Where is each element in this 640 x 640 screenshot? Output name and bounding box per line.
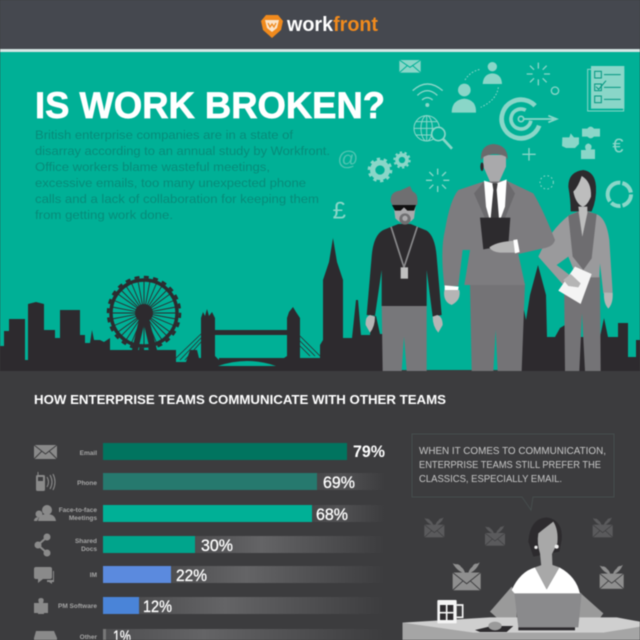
bar labels: Docs bbox=[81, 546, 97, 553]
bar: phone: 69% bbox=[323, 474, 355, 492]
bar: other bbox=[103, 628, 385, 640]
arch under bridge bbox=[218, 361, 276, 366]
bar labels: PM Software bbox=[58, 603, 97, 610]
bar labels: Phone bbox=[77, 480, 97, 487]
icon: puzzle piece bbox=[34, 598, 48, 614]
icon: wifi bbox=[413, 84, 443, 107]
icon: share bbox=[34, 534, 50, 556]
illustration: woman at desk with flying emails bbox=[403, 517, 640, 640]
intro text block: calls and a lack of collaboration for keeping them bbox=[35, 192, 319, 206]
bar: IM: 22% bbox=[176, 567, 207, 585]
callout: speech bubble: CLASSICS, ESPECIALLY EMAIL. bbox=[419, 474, 562, 485]
icon: envelope bbox=[399, 60, 421, 73]
people group bbox=[366, 144, 613, 371]
icon: plus bbox=[522, 148, 536, 161]
bar: PM software: 12% bbox=[143, 598, 172, 616]
callout: speech bubble bbox=[412, 434, 614, 510]
bar: face-to-face: 68% bbox=[316, 506, 348, 524]
section heading: HOW ENTERPRISE TEAMS COMMUNICATE WITH OTHER TEAMS bbox=[34, 392, 446, 407]
bar labels: IM bbox=[90, 572, 97, 579]
icon: sunburst bbox=[527, 63, 550, 85]
icon: euro: € bbox=[612, 136, 623, 158]
bar labels: Email bbox=[80, 450, 97, 457]
bar: face-to-face bbox=[103, 505, 385, 524]
intro text block: British enterprise companies are in a state of bbox=[35, 128, 294, 142]
skyline: london silhouette bbox=[0, 238, 640, 371]
bar labels: Face-to-face bbox=[59, 507, 97, 514]
icon: winged envelopes bbox=[424, 517, 624, 590]
bar: shared docs: 30% bbox=[201, 537, 233, 555]
bar: shared docs bbox=[103, 536, 385, 555]
icon: target and arrow bbox=[496, 94, 557, 144]
icon: donut chart bbox=[608, 183, 631, 206]
icon: email bbox=[34, 445, 57, 459]
bar: email: 79% bbox=[353, 443, 385, 461]
icon: connected people bbox=[452, 62, 502, 113]
intro text block: from getting work done. bbox=[35, 208, 173, 222]
intro text block: Office workers blame wasteful meetings, bbox=[35, 160, 270, 174]
icon: london eye bbox=[108, 277, 180, 350]
icon: gears bbox=[369, 152, 410, 181]
panel: header bar bbox=[0, 0, 640, 52]
bar labels bbox=[58, 450, 97, 640]
icon: mug bbox=[437, 600, 463, 623]
channel icons bbox=[34, 445, 57, 640]
icon: checklist bbox=[588, 66, 624, 111]
desk bbox=[403, 617, 640, 640]
icon: puzzle pieces bbox=[562, 127, 600, 159]
intro text block: excessive emails, too many unexpected phone bbox=[35, 176, 306, 190]
laptop bbox=[514, 593, 582, 630]
figure: woman bbox=[490, 517, 603, 623]
intro text block: disarray according to an annual study by Workfront. bbox=[35, 144, 330, 158]
icon: small ring bbox=[551, 87, 559, 94]
intro text block bbox=[35, 128, 330, 222]
figure: woman with papers bbox=[538, 170, 613, 371]
logo wordmark: workfront bbox=[286, 14, 378, 36]
icon: other device bbox=[34, 631, 57, 640]
bar: PM software bbox=[103, 597, 385, 616]
icon: globe with magnifier bbox=[414, 116, 452, 149]
icon: chat bubbles bbox=[34, 567, 54, 584]
icon: dotted circle bbox=[540, 176, 553, 189]
bar labels: Meetings bbox=[69, 515, 97, 522]
figure: man in suit with tablet bbox=[442, 144, 555, 371]
icon: workfront lion shield bbox=[261, 15, 283, 38]
callout: speech bubble: ENTERPRISE TEAMS STILL PREFER THE bbox=[419, 460, 601, 471]
bar: IM bbox=[103, 566, 385, 585]
background icons bbox=[333, 60, 631, 224]
icon: meeting people bbox=[34, 505, 56, 521]
icon: pound sign: £ bbox=[333, 197, 346, 224]
cables: bridge suspension bbox=[176, 334, 320, 360]
panel: teal hero bbox=[0, 52, 640, 370]
icon: sunburst bbox=[426, 169, 449, 192]
bar chart: communication channels bbox=[103, 443, 385, 640]
mouse pad and mouse bbox=[475, 622, 513, 632]
icon: at sign: @ bbox=[337, 147, 358, 170]
figure: man with lanyard bbox=[366, 186, 443, 371]
bar: phone bbox=[103, 473, 385, 492]
bar: email bbox=[103, 443, 385, 461]
icon: phone bbox=[36, 472, 55, 491]
callout: speech bubble: WHEN IT COMES TO COMMUNICATION, bbox=[419, 446, 606, 457]
title: IS WORK BROKEN? bbox=[35, 85, 385, 126]
bar labels: Shared bbox=[75, 538, 97, 545]
